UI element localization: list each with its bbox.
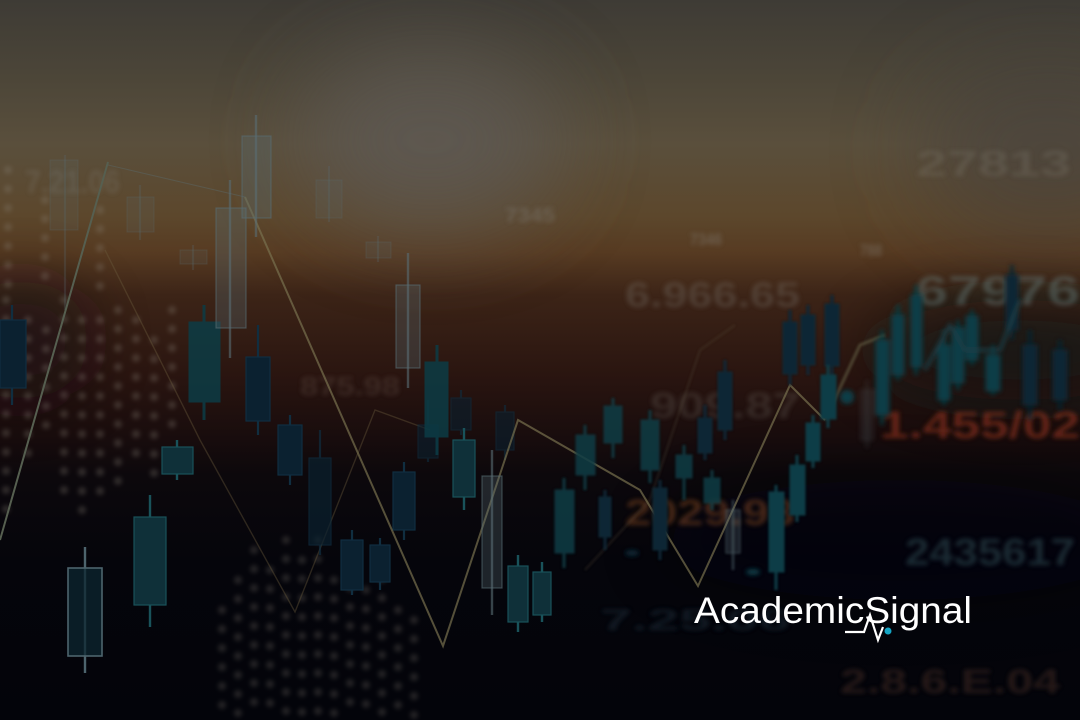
blurred ticker numbers: 6.966.65 xyxy=(625,276,800,315)
blurred ticker numbers: 875.98 xyxy=(300,371,400,401)
blurred ticker numbers: 2435617 xyxy=(905,532,1075,574)
blurred dot-matrix columns upper left xyxy=(6,170,172,520)
blurred ticker numbers: 7346 xyxy=(690,230,722,249)
foreground candlesticks left xyxy=(68,115,551,673)
main gold trend line xyxy=(0,162,885,646)
blurred dot-matrix columns lower middle xyxy=(222,540,414,720)
logo wordmark: AcademicSignal xyxy=(694,590,972,631)
logo pulse waveform xyxy=(845,615,883,640)
blurred ticker numbers: 1.455/02 xyxy=(880,405,1080,447)
blurred ticker numbers: 7.21.06 xyxy=(25,164,120,200)
blurred ticker numbers xyxy=(25,143,1080,701)
blurred ticker numbers: 788 xyxy=(860,241,882,260)
blurred candlesticks right xyxy=(555,295,839,590)
blurred ticker numbers: 2029.93 xyxy=(625,492,795,533)
distant dim candlesticks xyxy=(0,155,514,595)
blurred ticker numbers: 67976 xyxy=(915,267,1080,314)
logo: AcademicSignal xyxy=(694,590,972,640)
blurred ticker numbers: 7345 xyxy=(505,205,555,227)
blurred ticker numbers: 27813 xyxy=(916,143,1071,184)
blurred ticker numbers: 7.25.06 xyxy=(600,604,790,637)
blurred candlestick cluster far right xyxy=(625,265,1067,575)
logo teal dot xyxy=(884,628,892,634)
blurred ticker numbers: 909.87 xyxy=(650,385,800,426)
faint gold trend line xyxy=(105,250,735,612)
blurred ticker numbers: 2.8.6.E.04 xyxy=(840,663,1060,701)
